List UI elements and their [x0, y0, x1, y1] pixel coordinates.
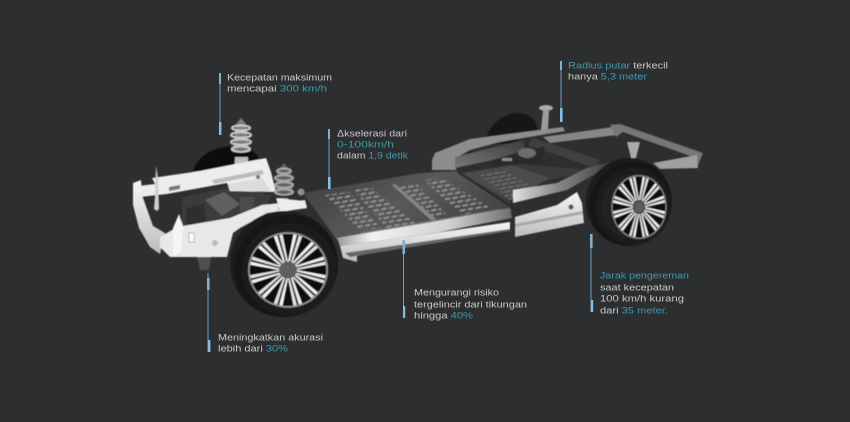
callout: steering accuracy: lebih dari 30% — [218, 344, 288, 354]
callout: braking distance: dari 35 meter. — [600, 306, 668, 316]
callout: acceleration — [328, 128, 409, 189]
chassis illustration — [133, 105, 703, 317]
callout: turning radius: Radius putar terkecil — [568, 60, 668, 70]
front coil spring far — [231, 118, 251, 172]
callout: top speed — [219, 72, 332, 135]
engine block — [182, 187, 272, 226]
callout: top speed: Kecepatan maksimum — [227, 72, 332, 82]
front wheel rim — [248, 233, 328, 307]
battery floor — [303, 164, 590, 240]
callout: braking distance: 100 km/h kurang — [600, 294, 684, 304]
side sill — [337, 208, 512, 262]
rear mechanical parts — [492, 146, 545, 172]
callout: braking distance — [590, 234, 689, 316]
rear far tire — [485, 113, 538, 144]
rear white side member — [515, 192, 584, 237]
callout: steering accuracy: Meningkatkan akurasi — [218, 332, 323, 342]
callout: turning radius — [560, 60, 668, 122]
callout: acceleration: dalam 1,9 detik — [337, 150, 409, 160]
front tire — [230, 211, 338, 317]
callout: top speed: mencapai 300 km/h — [227, 84, 327, 94]
callout: acceleration: Δkselerasi dari — [337, 128, 407, 138]
callout: skid risk — [402, 240, 527, 320]
rear wheel rim — [612, 175, 666, 239]
front bumper beam — [133, 180, 165, 254]
callout: skid risk: Mengurangi risiko — [414, 288, 499, 298]
front coil spring near — [275, 163, 307, 212]
callout: braking distance: saat kecepatan — [600, 282, 674, 292]
rear suspension top mount — [539, 105, 553, 130]
rear rail — [513, 162, 610, 203]
callout: skid risk: hingga 40% — [414, 310, 473, 320]
callout: steering accuracy — [207, 273, 323, 354]
callout: braking distance: Jarak pengereman — [600, 270, 689, 280]
floor panel: perforated sections — [325, 192, 380, 230]
callout: turning radius: hanya 5,3 meter — [568, 72, 647, 82]
callout: acceleration: 0-100km/h — [337, 140, 394, 150]
front upper rail — [138, 158, 276, 211]
front far tire — [193, 146, 260, 172]
callout: skid risk: tergelincir dari tikungan — [414, 300, 527, 310]
rear frame — [432, 124, 703, 170]
front lower rail — [160, 200, 307, 270]
rear tire — [586, 158, 672, 246]
